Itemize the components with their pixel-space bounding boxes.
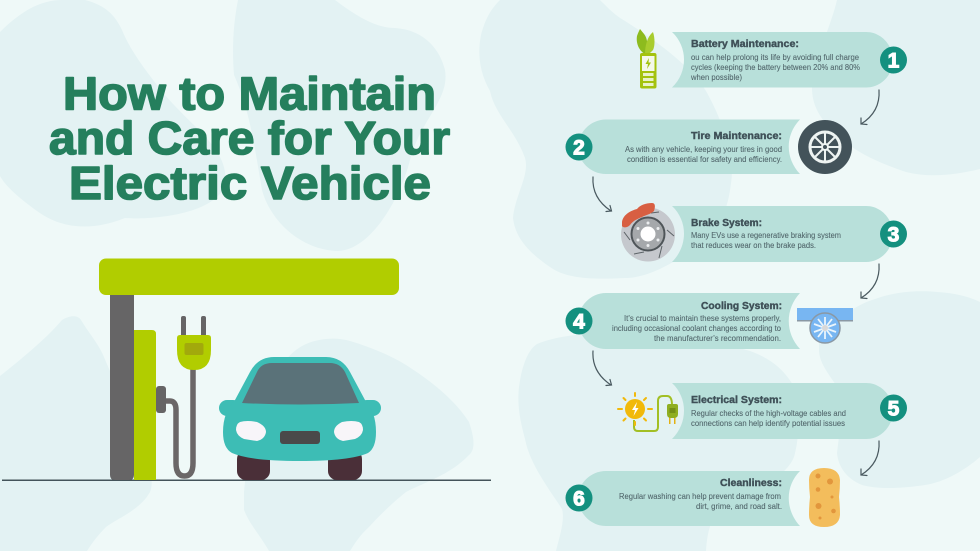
body	[691, 231, 841, 250]
banner	[578, 120, 800, 174]
step 5	[618, 383, 907, 439]
station box	[134, 330, 156, 480]
body	[690, 53, 860, 82]
number badge: 2	[573, 136, 585, 160]
number badge	[566, 134, 592, 160]
step 6	[566, 468, 840, 527]
arrow 1 to 2	[861, 90, 879, 124]
icon: battery with leaf	[637, 29, 656, 88]
number badge	[880, 220, 907, 248]
arrows between steps	[593, 90, 879, 476]
body: the manufacturer’s recommendation.	[654, 334, 781, 343]
car	[219, 357, 381, 480]
number badge	[566, 308, 592, 334]
body: Many EVs use a regenerative braking system	[691, 231, 841, 240]
banner	[578, 471, 800, 526]
number badge: 3	[888, 224, 899, 246]
body	[612, 314, 781, 343]
body	[625, 145, 782, 164]
heading: Battery Maintenance:	[691, 38, 799, 50]
body: condition is essential for safety and efficiency.	[627, 155, 782, 164]
icon: brake disc	[621, 203, 675, 262]
icon: cooling fan	[797, 308, 853, 343]
body: connections can help identify potential issues	[691, 419, 845, 428]
title: and Care for Your	[49, 112, 450, 164]
arrow 2 to 3	[593, 177, 612, 212]
heading: Brake System:	[691, 217, 762, 229]
body	[619, 492, 782, 511]
body: including occasional coolant changes according to	[612, 324, 781, 333]
body: when possible)	[690, 73, 742, 82]
arrow 5 to 6	[861, 441, 879, 476]
body: Regular washing can help prevent damage from	[619, 492, 781, 501]
banner	[672, 32, 893, 88]
step 3	[621, 203, 907, 262]
banner	[672, 383, 893, 439]
ground line	[2, 480, 491, 481]
number badge	[880, 46, 907, 74]
charging cable	[165, 368, 193, 476]
heading: Electrical System:	[691, 394, 782, 406]
title: Electric Vehicle	[69, 157, 431, 209]
number badge	[880, 394, 907, 422]
body: It’s crucial to maintain these systems properly,	[624, 314, 781, 323]
body: that reduces wear on the brake pads.	[691, 241, 816, 250]
number badge: 6	[573, 488, 585, 510]
plug	[177, 316, 211, 370]
number badge: 1	[888, 50, 900, 72]
number badge: 4	[573, 310, 585, 334]
arrow 4 to 5	[593, 351, 612, 386]
number badge	[566, 484, 592, 512]
station roof	[99, 258, 399, 295]
arrow 3 to 4	[861, 264, 879, 298]
body: dirt, grime, and road salt.	[696, 502, 782, 511]
cable connector	[156, 386, 166, 413]
illustration: charging station and car	[2, 258, 491, 481]
step 2	[566, 120, 852, 174]
number badge: 5	[888, 398, 900, 420]
heading: Cooling System:	[701, 300, 782, 312]
icon: electrical plug and sun	[618, 393, 678, 431]
body: As with any vehicle, keeping your tires in good	[625, 145, 782, 154]
body: ou can help prolong its life by avoiding full charge	[691, 53, 859, 62]
body	[691, 409, 846, 428]
step 1	[637, 29, 907, 88]
banner	[578, 293, 800, 349]
station pillar	[110, 290, 134, 480]
body: Regular checks of the high-voltage cables and	[691, 409, 846, 418]
heading: Cleanliness:	[720, 477, 782, 489]
body: cycles (keeping the battery between 20% and 80%	[691, 63, 860, 72]
banner	[672, 206, 893, 262]
icon: sponge	[809, 468, 840, 527]
title: How to Maintain	[63, 68, 436, 120]
icon: tire	[798, 120, 852, 174]
heading: Tire Maintenance:	[691, 130, 782, 142]
title	[49, 68, 450, 209]
step 4	[566, 293, 853, 349]
